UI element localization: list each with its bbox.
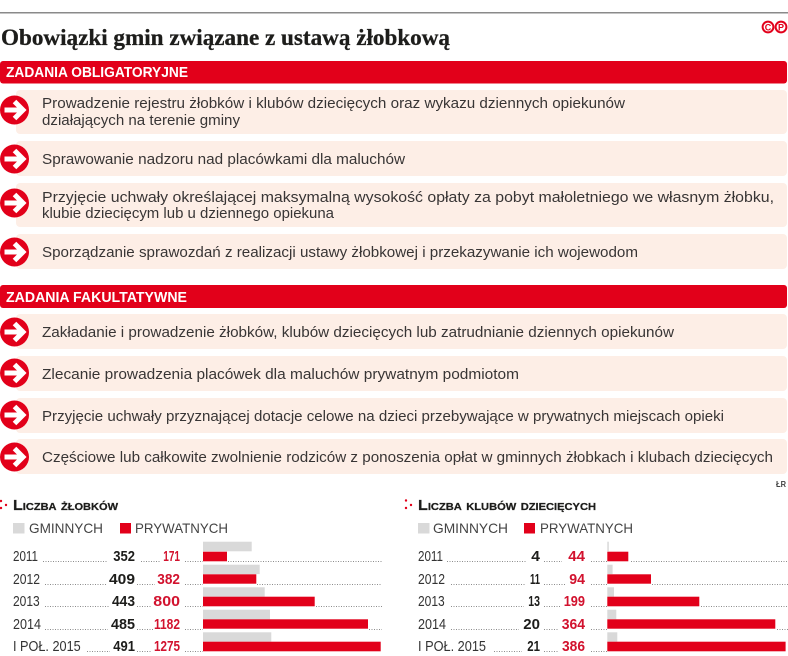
row 2012: 2012 <box>418 572 445 588</box>
row I poł. 2015: 1275 <box>154 639 180 655</box>
row 2013: 2013 <box>13 594 40 610</box>
legend: PRYWATNYCH <box>135 520 228 536</box>
item: sporządzanie sprawozdań: Sporządzanie sprawozdań z realizacji ustawy żłobkowej i przekazywanie ich wojewodom <box>42 244 638 261</box>
row 2013 <box>418 587 699 610</box>
row 2014: 2014 <box>13 617 41 633</box>
author credit: ŁR <box>776 480 786 489</box>
heading: zadania fakultatywne: ZADANIA FAKULTATYWNE <box>6 290 187 306</box>
row 2013 <box>13 587 315 610</box>
logo: CP <box>763 22 786 32</box>
row I poł. 2015: 491 <box>113 639 135 655</box>
row 2014: 364 <box>562 617 585 633</box>
item: zlecanie prowadzenia: Zlecanie prowadzenia placówek dla maluchów prywatnym podmiotom <box>42 366 519 383</box>
heading: zadania fakultatywne <box>0 285 787 308</box>
row 2011 <box>13 542 252 565</box>
row 2014: 2014 <box>418 617 446 633</box>
row I poł. 2015: I POŁ. 2015 <box>418 639 486 655</box>
logo: CP: C <box>765 22 772 32</box>
item: prowadzenie rejestru <box>0 90 787 134</box>
chart: liczba klubów dziecięcych <box>405 498 788 655</box>
item: sprawowanie nadzoru: Sprawowanie nadzoru nad placówkami dla maluchów <box>42 151 405 168</box>
row 2011: 171 <box>163 549 180 565</box>
heading: zadania obligatoryjne: ZADANIA OBLIGATORYJNE <box>6 65 188 81</box>
row 2012: 2012 <box>13 572 40 588</box>
row 2013: 800 <box>153 594 180 610</box>
title: Obowiązki gmin związane z ustawą żłobkową <box>1 25 450 50</box>
row 2012: 382 <box>157 572 180 588</box>
chart heading: Liczba klubów dziecięcych <box>418 498 596 514</box>
row 2014 <box>13 610 368 633</box>
legend: GMINNYCH <box>29 520 103 536</box>
row 2012: 94 <box>569 572 585 588</box>
panel: zadania obligatoryjne <box>0 61 787 269</box>
row 2014: 1182 <box>154 617 180 633</box>
item: zwolnienie rodziców <box>0 439 787 474</box>
row 2011: 2011 <box>418 549 443 565</box>
item: przyjęcie uchwały o opłatach <box>0 183 787 227</box>
panel: zadania fakultatywne <box>0 285 787 474</box>
heading: zadania obligatoryjne <box>0 61 787 84</box>
row 2011: 2011 <box>13 549 38 565</box>
item: zakładanie żłobków <box>0 314 787 349</box>
row 2014: 485 <box>111 617 135 633</box>
item: przyjęcie uchwały o dotacjach: Przyjęcie uchwały przyznającej dotacje celowe na dzieci przebywające w prywatnych miejscach opieki <box>42 408 724 425</box>
row I poł. 2015 <box>418 632 786 655</box>
legend <box>13 520 228 536</box>
row 2013: 2013 <box>418 594 445 610</box>
row I poł. 2015 <box>13 632 381 655</box>
row 2013: 13 <box>528 594 540 610</box>
row I poł. 2015: 21 <box>527 639 540 655</box>
row 2011: 4 <box>531 549 540 565</box>
row 2013: 443 <box>112 594 135 610</box>
row 2012: 409 <box>109 572 135 588</box>
item: zakładanie żłobków: Zakładanie i prowadzenie żłobków, klubów dziecięcych lub zatrudnianie dziennych opiekunów <box>42 324 674 341</box>
row 2011 <box>418 542 628 565</box>
row I poł. 2015: I POŁ. 2015 <box>13 639 81 655</box>
row 2011: 44 <box>568 549 585 565</box>
item: prowadzenie rejestru: działających na terenie gminy <box>42 112 240 129</box>
item: prowadzenie rejestru: Prowadzenie rejestru żłobków i klubów dziecięcych oraz wykazu dziennych opiekunów <box>42 95 625 112</box>
item: przyjęcie uchwały o dotacjach <box>0 398 787 433</box>
row 2012 <box>13 565 260 588</box>
row 2014: 20 <box>523 617 540 633</box>
logo: CP: P <box>778 22 784 32</box>
item: zwolnienie rodziców: Częściowe lub całkowite zwolnienie rodziców z ponoszenia opłat w gminnych żłobkach i klubach dziecięcych <box>42 449 773 466</box>
row 2012: 11 <box>530 572 540 588</box>
row I poł. 2015: 386 <box>562 639 585 655</box>
legend <box>418 520 633 536</box>
row 2011: 352 <box>113 549 135 565</box>
row 2012 <box>418 565 651 588</box>
item: zlecanie prowadzenia <box>0 356 787 391</box>
legend: PRYWATNYCH <box>540 520 633 536</box>
row 2013: 199 <box>564 594 585 610</box>
item: przyjęcie uchwały o opłatach: klubie dziecięcym lub u dziennego opiekuna <box>42 205 335 222</box>
row 2014 <box>418 610 775 633</box>
item: sporządzanie sprawozdań <box>0 234 787 269</box>
chart heading: Liczba żłobków <box>13 498 119 514</box>
legend: GMINNYCH <box>433 520 508 536</box>
item: sprawowanie nadzoru <box>0 141 787 176</box>
item: przyjęcie uchwały o opłatach: Przyjęcie uchwały określającej maksymalną wysokość opłaty za pobyt małoletniego we własnym żłobku, <box>42 189 774 206</box>
chart: liczba żłobków <box>0 498 382 655</box>
